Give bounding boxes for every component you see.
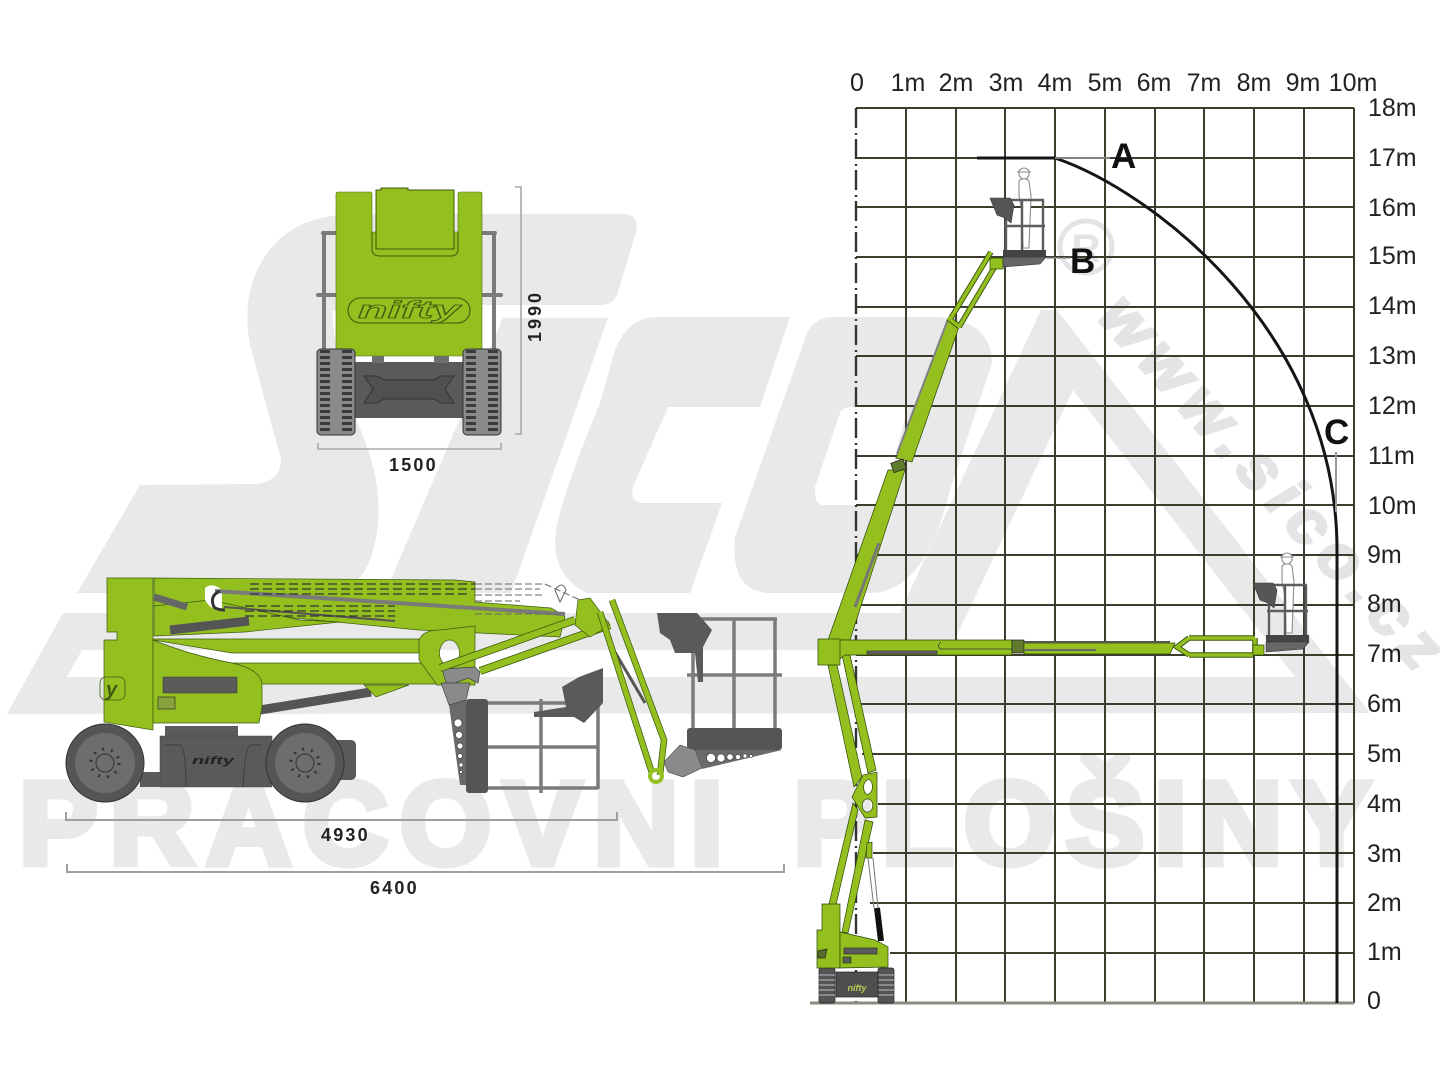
label C: C	[1324, 413, 1349, 452]
centre panel	[376, 188, 454, 249]
leader A	[1055, 157, 1110, 159]
top axis labels: 3m	[989, 69, 1023, 97]
right axis labels: 6m	[1367, 690, 1402, 718]
right axis labels: 17m	[1368, 144, 1417, 172]
lift in chart: raised boom	[828, 252, 1003, 640]
cage floor	[687, 728, 782, 750]
pivot linkage	[442, 667, 480, 686]
control box	[657, 613, 712, 682]
knuckle	[575, 598, 610, 637]
lower boom cylinder	[855, 543, 879, 607]
horizontal platform with operator	[1253, 553, 1309, 652]
turret box	[843, 957, 851, 963]
raised platform with operator	[990, 168, 1046, 267]
stowed cage rails	[488, 699, 598, 793]
right axis labels: 11m	[1368, 442, 1415, 470]
jib head	[990, 258, 1003, 269]
front wheel	[66, 724, 144, 802]
elbow hinge	[852, 772, 877, 818]
working cage	[657, 613, 782, 777]
boom second section	[1024, 643, 1175, 654]
axle	[355, 356, 463, 418]
wheelbase dimension: 4930	[321, 825, 370, 845]
jib dark outlines	[948, 252, 997, 327]
axle	[836, 972, 878, 997]
second cylinder	[1024, 649, 1096, 651]
boom lower arm band one	[153, 639, 425, 653]
top axis labels: 6m	[1137, 69, 1171, 97]
overall length dimension: 6400	[370, 878, 419, 898]
overall length dimension bracket	[67, 864, 784, 872]
rear wheel	[266, 724, 344, 802]
left tyre	[317, 349, 355, 435]
top axis labels: 7m	[1187, 69, 1221, 97]
front view of machine	[317, 188, 501, 435]
wheels	[819, 968, 894, 1003]
right axis labels	[1367, 94, 1417, 1015]
pivot block	[818, 639, 840, 665]
right axis labels: 15m	[1368, 242, 1417, 270]
turret box	[158, 697, 175, 709]
working envelope curve	[977, 158, 1337, 1003]
stowed cage	[441, 668, 603, 793]
control box	[990, 198, 1014, 223]
right axis labels: 8m	[1367, 590, 1402, 618]
right axis labels: 4m	[1367, 790, 1402, 818]
top axis labels: 10m	[1329, 69, 1377, 97]
boom lower arm band two	[232, 663, 437, 684]
label A: A	[1111, 137, 1136, 176]
reach chart centre axis	[855, 108, 857, 1003]
right tyre	[463, 349, 501, 435]
leader B	[1047, 257, 1070, 259]
right axis labels: 2m	[1367, 889, 1402, 917]
logo text: nifty	[358, 297, 463, 324]
support holes	[706, 754, 753, 762]
top axis labels	[850, 69, 1377, 97]
jib bar outlines	[600, 600, 664, 775]
leader C	[1335, 452, 1337, 512]
column logo	[818, 949, 827, 958]
cage rails	[687, 619, 782, 728]
upper boom cylinder	[897, 319, 948, 454]
jib strut	[612, 647, 645, 703]
jib bars	[600, 600, 664, 775]
cage support	[1266, 642, 1309, 652]
outrigger cylinder	[260, 692, 371, 710]
reach chart grid	[856, 108, 1354, 1003]
turret body	[153, 640, 262, 723]
jib bars	[948, 252, 997, 327]
control box	[1253, 583, 1277, 608]
wheelbase dimension bracket	[66, 812, 617, 820]
stowed control box	[534, 668, 603, 723]
turret	[840, 932, 888, 968]
main boom upper	[896, 318, 960, 462]
reach chart ground line	[810, 1002, 1354, 1004]
turret slot	[844, 948, 877, 954]
operator	[1281, 553, 1294, 633]
side view of machine	[66, 578, 782, 802]
column	[104, 578, 153, 730]
chassis logo: nifty	[192, 755, 236, 767]
height dimension bracket	[515, 187, 521, 434]
top axis labels: 1m	[891, 69, 925, 97]
lift in chart: base and lower arm	[817, 655, 894, 1003]
label B: B	[1070, 242, 1095, 281]
top axis labels: 5m	[1088, 69, 1122, 97]
watermark: PLOSINY: PLOŠINY	[793, 757, 1371, 890]
lower arm pair	[828, 655, 876, 933]
cage rails	[1267, 585, 1308, 635]
right axis labels: 16m	[1368, 194, 1417, 222]
jib frame	[1177, 638, 1255, 655]
jib frame outline	[1177, 638, 1255, 655]
turret slot	[163, 677, 237, 693]
column logo: y	[105, 679, 118, 701]
watermark: letter S	[77, 214, 637, 593]
top axis labels: 0	[850, 69, 864, 97]
cage floor	[1003, 250, 1046, 257]
cage pivot	[664, 745, 702, 777]
right axis labels: 7m	[1367, 640, 1402, 668]
top axis labels: 9m	[1286, 69, 1320, 97]
right axis labels: 0	[1367, 987, 1381, 1015]
cylinder mount	[364, 685, 409, 697]
watermark: SICO logo and text	[7, 214, 1440, 890]
width dimension bracket	[318, 443, 501, 449]
linkage bars	[440, 620, 610, 671]
lift in chart: horizontal boom	[818, 638, 1264, 665]
axle logo: nifty	[848, 983, 867, 993]
main boom lower	[828, 470, 905, 640]
top axis labels: 8m	[1237, 69, 1271, 97]
watermark: letter O	[734, 317, 992, 593]
cage floor	[1266, 635, 1309, 642]
stowed cage support	[449, 700, 466, 785]
boom first section	[832, 640, 1012, 663]
top axis labels: 4m	[1038, 69, 1072, 97]
cage support	[1003, 257, 1046, 267]
watermark: registered mark	[1060, 221, 1112, 273]
stowed cage floor	[466, 699, 488, 793]
right axis labels: 14m	[1368, 292, 1417, 320]
watermark: PRACOVNI: PRACOVNI	[19, 758, 723, 890]
right axis labels: 1m	[1367, 938, 1402, 966]
ghost dashes beyond boom	[475, 584, 580, 614]
watermark: letter I	[385, 318, 608, 593]
width dimension: 1500	[389, 455, 438, 475]
boom joint	[891, 459, 906, 473]
stowed boom dashes	[245, 584, 475, 616]
stowed pivot	[441, 683, 470, 705]
side rails	[318, 233, 501, 350]
cylinder	[866, 842, 881, 941]
right axis labels: 9m	[1367, 541, 1402, 569]
cage support	[692, 750, 782, 769]
logo badge	[348, 298, 470, 323]
watermark: roof logo and bands	[7, 310, 1370, 714]
stowed cage holes	[454, 719, 463, 774]
first cylinder	[867, 651, 937, 654]
hinge plate	[419, 626, 475, 685]
jib end loop	[650, 770, 662, 782]
right axis labels: 10m	[1368, 492, 1417, 520]
right axis labels: 3m	[1367, 840, 1402, 868]
right axis labels: 12m	[1368, 392, 1417, 420]
first section step	[938, 642, 1012, 649]
cage rails	[1004, 200, 1045, 250]
top axis labels: 2m	[939, 69, 973, 97]
body	[336, 192, 482, 356]
upper arm assembly	[154, 578, 565, 637]
midpoint joint	[1012, 640, 1024, 653]
chassis	[140, 726, 356, 787]
top panel slot	[372, 232, 458, 256]
right axis labels: 18m	[1368, 94, 1417, 122]
watermark: registered mark: R	[1072, 227, 1101, 271]
right axis labels: 5m	[1367, 740, 1402, 768]
height dimension: 1990	[525, 290, 545, 342]
jib head	[1253, 645, 1264, 655]
right axis labels: 13m	[1368, 342, 1417, 370]
column	[817, 904, 840, 968]
watermark: letter C	[555, 317, 790, 593]
operator	[1018, 168, 1031, 248]
column logo	[100, 677, 125, 701]
top rod	[1024, 641, 1170, 643]
linkage bar outlines	[440, 620, 610, 671]
